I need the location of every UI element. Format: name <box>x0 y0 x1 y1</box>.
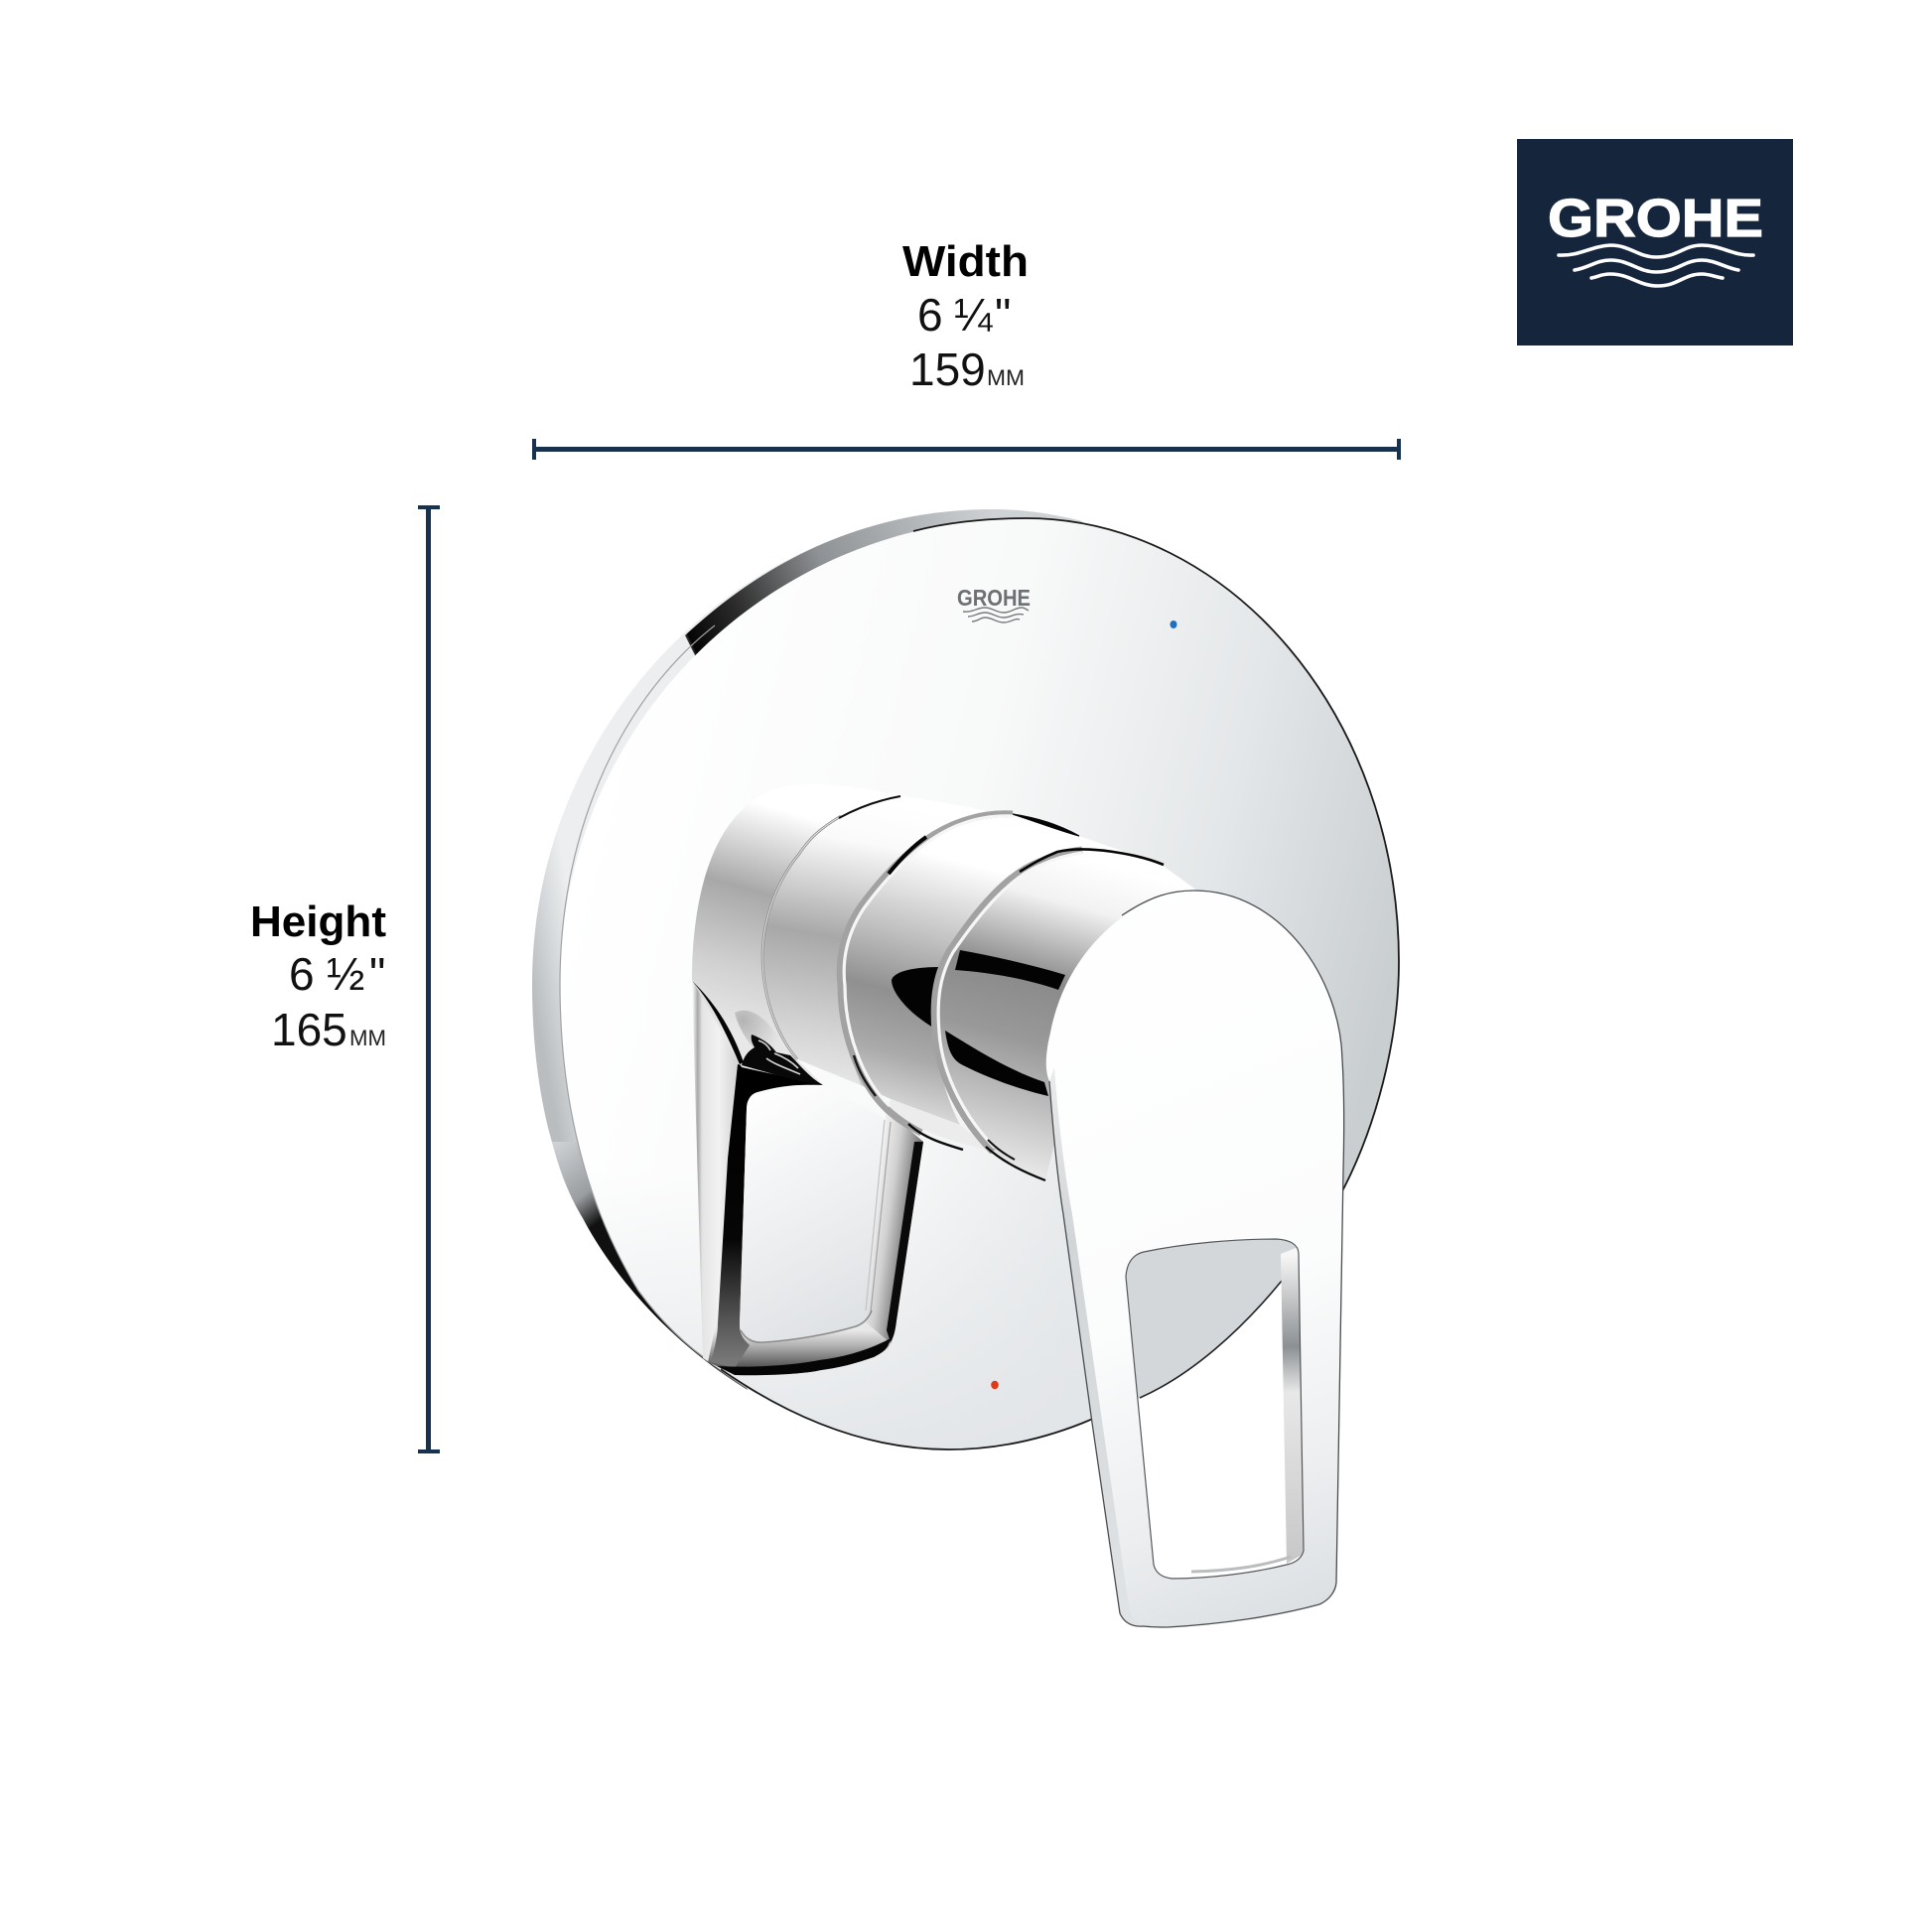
height label: ½ <box>327 948 364 1000</box>
handle left bevel <box>1049 1067 1144 1626</box>
lever window <box>740 1085 887 1342</box>
GROHE brand logo badge <box>1517 139 1793 345</box>
height label: 6 <box>289 948 315 1000</box>
lever window highlights <box>741 1120 891 1342</box>
engraved plate logo <box>957 585 1031 622</box>
seam three <box>934 850 1164 1180</box>
width label: 159 <box>909 344 986 395</box>
rotary body third section <box>840 815 1162 1152</box>
handle opening <box>1126 1239 1304 1579</box>
cold indicator dot <box>1170 621 1177 628</box>
height label: " <box>369 948 385 1000</box>
height label: 165 <box>271 1004 347 1055</box>
hot indicator dot <box>991 1381 999 1389</box>
rear lever loop <box>692 981 923 1375</box>
lever frame right side <box>864 1110 923 1343</box>
lever frame bottom <box>708 1311 897 1374</box>
escutcheon plate rim <box>532 509 1082 1390</box>
valve trim product illustration <box>532 509 1399 1627</box>
engraved plate logo: GROHE <box>957 585 1031 611</box>
height dimension line <box>418 505 440 1453</box>
rotary body back section <box>692 784 900 1085</box>
width dimension line <box>532 439 1401 460</box>
width label: " <box>995 289 1011 341</box>
width label <box>902 237 1029 395</box>
lever bottom black edge <box>717 1338 891 1375</box>
front lever handle <box>1046 891 1344 1627</box>
width label: MM <box>987 365 1025 390</box>
width label: Width <box>902 237 1029 286</box>
height label: MM <box>349 1026 386 1050</box>
seam one <box>762 796 900 1059</box>
seam two <box>840 814 1079 1150</box>
dark reflections on body <box>892 950 1065 1096</box>
height label: Height <box>250 897 386 946</box>
plate seen through opening <box>1122 1231 1311 1572</box>
lever frame left band <box>711 1064 823 1368</box>
width label: 6 <box>917 289 943 341</box>
GROHE brand logo badge: GROHE <box>1548 189 1763 248</box>
rotary body front section <box>934 851 1201 1180</box>
lever outer wedge <box>692 981 744 1370</box>
width label: ¼ <box>954 289 993 341</box>
handle outline <box>1049 891 1344 1627</box>
body ring seams <box>762 796 1164 1180</box>
escutcheon plate face <box>560 518 1399 1449</box>
lever right black edge <box>887 1142 923 1342</box>
rotary body middle section <box>762 796 1079 1085</box>
lever neck detail <box>692 981 823 1085</box>
height label <box>250 897 386 1055</box>
